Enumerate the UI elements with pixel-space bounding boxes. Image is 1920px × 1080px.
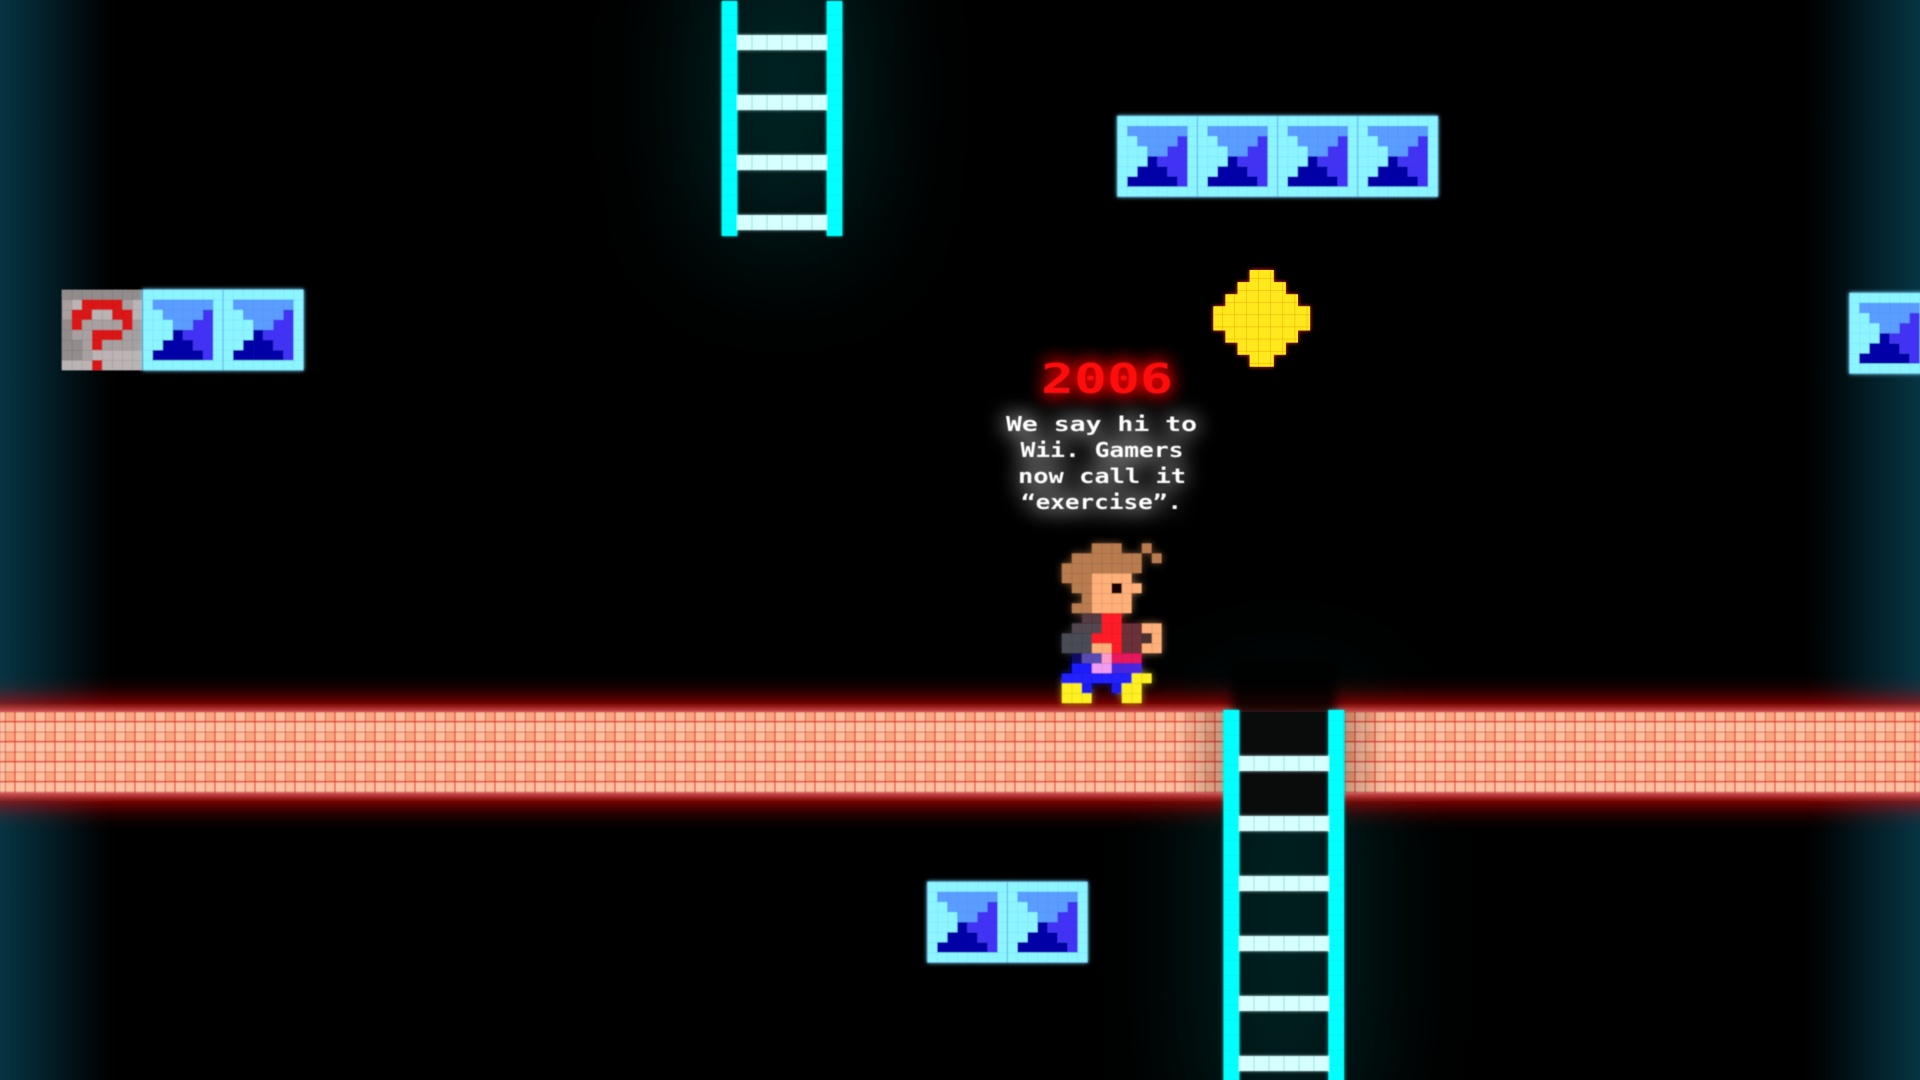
right rail xyxy=(1328,710,1344,1080)
caption: now call it xyxy=(1018,464,1186,488)
left rail xyxy=(722,1,737,236)
floor tiles right xyxy=(1344,712,1920,793)
floor wide glow xyxy=(0,704,1920,801)
ladder: top xyxy=(722,1,842,236)
caption: Wii. Gamers xyxy=(1020,438,1184,462)
gap shade above ladder xyxy=(1232,660,1336,720)
rungs xyxy=(1239,756,1329,1071)
question block xyxy=(62,290,143,370)
block row: left xyxy=(143,290,304,370)
floor platform xyxy=(0,660,1920,822)
gray tile xyxy=(62,290,143,370)
ladder shade right xyxy=(1344,712,1389,793)
block: right edge xyxy=(1849,293,1920,374)
year heading: 2006 xyxy=(1041,355,1173,403)
ladder shade left xyxy=(1175,712,1224,793)
rungs xyxy=(737,35,827,230)
floor tight glow xyxy=(0,709,1920,796)
question mark xyxy=(72,300,132,370)
caption xyxy=(1006,412,1197,514)
right rail xyxy=(827,1,842,236)
ladder: bottom xyxy=(1224,710,1344,1080)
coin xyxy=(1213,270,1310,367)
caption: “exercise”. xyxy=(1021,490,1182,514)
block row: top right xyxy=(1117,116,1438,197)
caption: We say hi to xyxy=(1006,412,1197,436)
floor tiles left xyxy=(0,712,1224,793)
floor gap xyxy=(1224,712,1344,822)
character xyxy=(1056,538,1168,708)
left rail xyxy=(1224,710,1239,1080)
block row: bottom xyxy=(927,882,1088,962)
